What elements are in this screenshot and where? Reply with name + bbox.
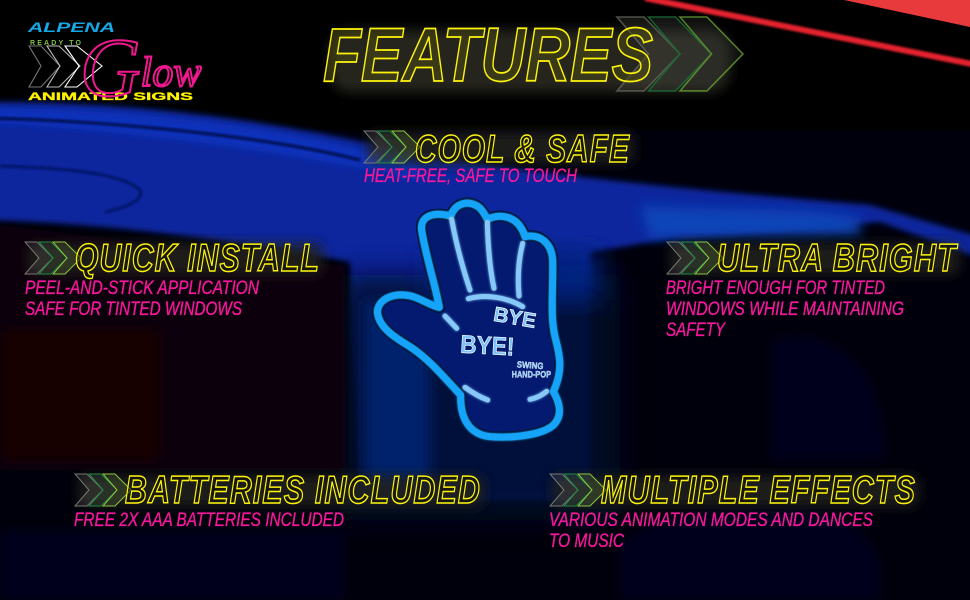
heading: Cool & Safe: COOL & SAFE [415,128,630,171]
description: Multiple Effects: VARIOUS ANIMATION MODES AND DANCES [549,510,873,531]
hand text: Bye Bye! Swing Hand-Pop: HAND-POP [512,369,551,379]
hand text: Bye Bye! Swing Hand-Pop [460,303,551,379]
description: Quick Install [25,278,259,320]
title chevrons [617,17,743,91]
icon: chevrons [75,474,131,506]
heading haze [553,475,919,507]
description: Multiple Effects [549,510,873,552]
description: Multiple Effects: TO MUSIC [549,531,624,552]
title haze [330,30,730,92]
logo: Alpena Ready to Glow Animated Signs: ALPENA [26,19,115,35]
description: Cool & Safe: HEAT-FREE, SAFE TO TOUCH [364,166,577,187]
logo: Alpena Ready to Glow Animated Signs: ANIMATED SIGNS [28,91,193,103]
description: Quick Install: SAFE FOR TINTED WINDOWS [25,299,242,320]
description: Ultra Bright: BRIGHT ENOUGH FOR TINTED [666,278,885,299]
heading: Batteries Included: BATTERIES INCLUDED [125,469,481,512]
description: Batteries Included: FREE 2X AAA BATTERIES INCLUDED [74,510,344,531]
feature: Cool & Safe [364,128,634,187]
feature: Quick Install [25,237,323,320]
logo: Alpena Ready to Glow Animated Signs: READY TO [30,40,82,47]
icon: chevrons [550,474,606,506]
description: Ultra Bright: SAFETY [666,320,726,341]
hand text: Bye Bye! Swing Hand-Pop: SWING [517,359,544,371]
feature: Multiple Effects [549,469,919,552]
feature: Batteries Included [74,469,484,531]
neon finger and palm lines [445,219,547,400]
icon: chevrons [25,242,81,274]
logo: Alpena Ready to Glow Animated Signs: low [141,50,201,96]
logo: Alpena Ready to Glow Animated Signs [26,19,201,115]
hand backing [377,203,560,437]
hand text: Bye Bye! Swing Hand-Pop: BYE! [460,331,515,361]
description: Ultra Bright [666,278,904,341]
logo: Alpena Ready to Glow Animated Signs: G [80,22,141,115]
heading haze [368,132,634,164]
heading haze [78,475,484,507]
icon: chevrons [667,242,723,274]
heading: Quick Install: QUICK INSTALL [75,237,320,280]
hand neon sign [377,203,560,437]
description: Quick Install: PEEL-AND-STICK APPLICATION [25,278,259,299]
description: Ultra Bright: WINDOWS WHILE MAINTAINING [666,299,904,320]
hand text: Bye Bye! Swing Hand-Pop: BYE [492,303,538,333]
heading haze [28,243,323,275]
icon: chevrons [364,131,420,163]
heading haze [670,243,960,275]
neon outline [377,203,560,437]
feature: Ultra Bright [666,237,960,341]
title: Features: FEATURES [323,13,653,98]
